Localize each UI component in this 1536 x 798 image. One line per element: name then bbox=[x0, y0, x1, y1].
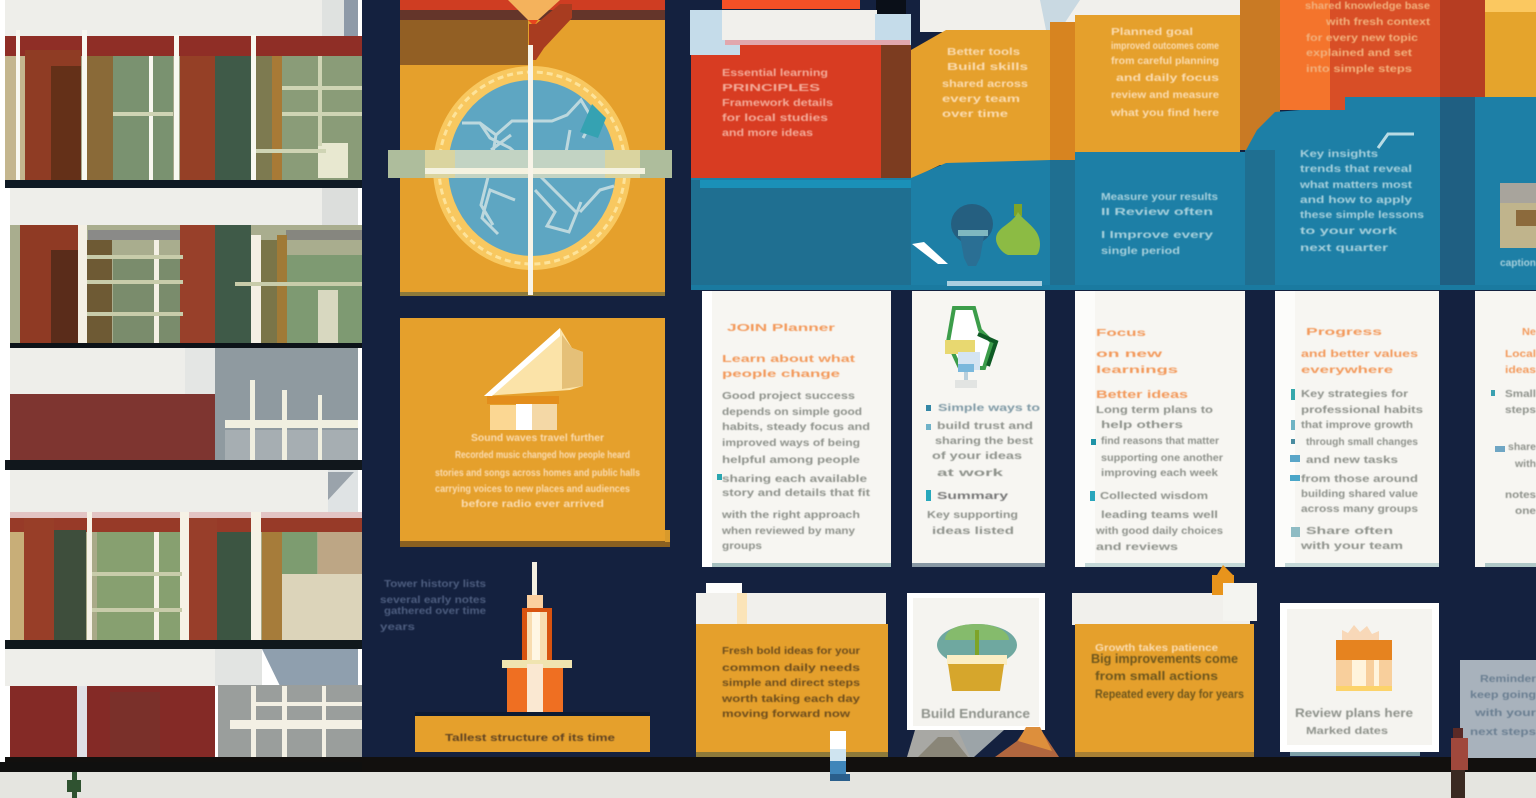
orange columns: explained and set bbox=[1306, 48, 1413, 59]
bottom panel 1: common daily needs bbox=[722, 663, 861, 674]
icon: mountains bbox=[907, 727, 1059, 757]
grey card: keep going bbox=[1470, 690, 1536, 701]
card 5: with bbox=[1514, 459, 1536, 470]
panel: gramophone bbox=[400, 318, 670, 547]
grey card bbox=[1460, 660, 1536, 758]
panel: globe bbox=[388, 0, 672, 296]
orange columns: for every new topic bbox=[1306, 33, 1419, 44]
orange columns: improved outcomes come bbox=[1111, 41, 1219, 52]
note text: years bbox=[380, 622, 416, 633]
red panel: Framework details bbox=[722, 98, 834, 109]
bottom panel 2: Big improvements come bbox=[1091, 651, 1238, 666]
card 4: everywhere bbox=[1301, 365, 1394, 376]
text block: stories and songs across homes and public halls bbox=[435, 468, 640, 479]
blue band: Key insights bbox=[1300, 149, 1379, 160]
floor 2 bbox=[10, 188, 362, 348]
card 2: build trust and bbox=[937, 421, 1033, 432]
card 1: habits, steady focus and bbox=[722, 422, 870, 433]
card 2: of your ideas bbox=[932, 451, 1023, 462]
card 2: Simple ways to bbox=[938, 403, 1040, 414]
red panel bbox=[690, 0, 911, 179]
card 1: when reviewed by many bbox=[721, 526, 855, 537]
icon: trend line bbox=[1378, 134, 1414, 148]
card 1: depends on simple good bbox=[722, 407, 862, 418]
bottom card: calendar bbox=[1280, 603, 1439, 756]
text block: carrying voices to new places and audiences bbox=[435, 484, 630, 495]
red panel: for local studies bbox=[722, 113, 829, 124]
bottom card: calendar: Review plans here bbox=[1295, 706, 1413, 720]
bottom panel 2: Repeated every day for years bbox=[1095, 687, 1244, 701]
card 1: Good project success bbox=[722, 391, 856, 402]
icon: bulb bbox=[951, 204, 993, 266]
note text bbox=[380, 579, 487, 633]
card 3: Long term plans to bbox=[1096, 405, 1213, 416]
figure: person in blue bbox=[830, 731, 850, 781]
card 5: ideas bbox=[1505, 365, 1536, 376]
card 5: Local bbox=[1505, 349, 1536, 360]
card 3: on new bbox=[1096, 349, 1162, 360]
bottom panel 2: Growth takes patience bbox=[1095, 643, 1219, 654]
bottom card: plant bbox=[907, 593, 1059, 757]
ground bbox=[0, 757, 1536, 798]
card 1: improved ways of being bbox=[722, 438, 860, 449]
card 5: notes bbox=[1505, 490, 1536, 501]
icon: goblet bbox=[945, 308, 996, 388]
blue band: I Improve every bbox=[1101, 230, 1214, 241]
card 5: share bbox=[1508, 442, 1536, 453]
orange columns: from careful planning bbox=[1111, 56, 1219, 67]
figure: plant bbox=[67, 772, 81, 798]
card 3: Collected wisdom bbox=[1100, 491, 1208, 502]
icon: calendar bbox=[1336, 625, 1392, 691]
card 3: with good daily choices bbox=[1095, 526, 1223, 537]
card 1: groups bbox=[722, 541, 763, 552]
blue band: single period bbox=[1101, 246, 1180, 257]
card 2 bbox=[912, 291, 1045, 567]
card 3: leading teams well bbox=[1101, 510, 1218, 521]
orange columns: Better tools bbox=[947, 47, 1021, 58]
card 5: Ne bbox=[1522, 327, 1536, 338]
orange columns: Planned goal bbox=[1111, 27, 1193, 38]
card 4: and better values bbox=[1301, 349, 1419, 360]
card 5: Small bbox=[1505, 389, 1536, 400]
icon: pear bbox=[996, 204, 1040, 255]
card 3: help others bbox=[1101, 420, 1184, 431]
orange columns bbox=[911, 0, 1536, 179]
card 4: building shared value bbox=[1301, 489, 1418, 500]
floor 4 bbox=[5, 470, 362, 649]
card 2: ideas listed bbox=[932, 526, 1014, 537]
icon: white arrow bbox=[912, 242, 948, 264]
text block: before radio ever arrived bbox=[461, 499, 604, 510]
floor 3 bbox=[5, 348, 362, 470]
icon: tower bbox=[502, 562, 572, 712]
blue band: what matters most bbox=[1299, 180, 1413, 191]
label bar bbox=[415, 712, 650, 752]
bottom panel 1 bbox=[696, 583, 888, 757]
card 3: supporting one another bbox=[1101, 453, 1223, 464]
figure: person in red bbox=[1451, 728, 1468, 798]
card 1: story and details that fit bbox=[722, 488, 871, 499]
orange columns: what you find here bbox=[1110, 108, 1220, 119]
card 2: at work bbox=[937, 468, 1004, 479]
card 4: that improve growth bbox=[1301, 420, 1413, 431]
blue band: to your work bbox=[1300, 226, 1398, 237]
card 3: Focus bbox=[1096, 328, 1147, 339]
card 3: learnings bbox=[1096, 365, 1179, 376]
card 1: with the right approach bbox=[721, 510, 860, 521]
floor 5 bbox=[5, 649, 362, 762]
card 1: helpful among people bbox=[722, 455, 861, 466]
blue band: next quarter bbox=[1300, 243, 1388, 254]
blue band bbox=[691, 97, 1536, 290]
icon: globe bbox=[388, 45, 672, 295]
orange columns: Build skills bbox=[947, 62, 1029, 73]
label bar: Tallest structure of its time bbox=[445, 733, 616, 744]
floor 1 bbox=[5, 0, 362, 188]
card 1: sharing each available bbox=[722, 474, 868, 485]
bottom panel 2: from small actions bbox=[1095, 669, 1218, 683]
orange columns: shared across bbox=[942, 79, 1029, 90]
grey card: Reminder bbox=[1480, 674, 1536, 685]
icon: gramophone bbox=[484, 328, 583, 430]
card 5 bbox=[1475, 291, 1536, 567]
card 5: one bbox=[1515, 506, 1536, 517]
card 1: Learn about what bbox=[722, 354, 856, 365]
panel: building bbox=[0, 0, 362, 772]
blue band: and how to apply bbox=[1300, 195, 1413, 206]
note text: several early notes bbox=[380, 595, 487, 606]
orange columns: into simple steps bbox=[1306, 64, 1413, 75]
bottom panel 1: moving forward now bbox=[722, 709, 850, 720]
blue band: caption bbox=[1500, 258, 1536, 269]
note text: gathered over time bbox=[384, 606, 486, 617]
blue band: trends that reveal bbox=[1300, 164, 1412, 175]
orange columns: with fresh context bbox=[1325, 17, 1431, 28]
red panel: and more ideas bbox=[722, 128, 814, 139]
orange columns: and daily focus bbox=[1116, 73, 1220, 84]
card 4 bbox=[1275, 291, 1439, 567]
card 3: find reasons that matter bbox=[1101, 436, 1219, 447]
card 3 bbox=[1075, 291, 1245, 567]
card 4: from those around bbox=[1301, 474, 1418, 485]
thumbnail bbox=[1500, 183, 1536, 248]
card 4: Share often bbox=[1306, 526, 1393, 537]
text block bbox=[435, 433, 640, 510]
card 2: Key supporting bbox=[927, 510, 1018, 521]
red panel: PRINCIPLES bbox=[722, 83, 821, 94]
icon: plant bbox=[937, 624, 1017, 691]
bottom panel 1: Fresh bold ideas for your bbox=[722, 646, 860, 657]
card 3: and reviews bbox=[1096, 542, 1179, 553]
card 3: Better ideas bbox=[1096, 389, 1188, 401]
grey card: next steps bbox=[1470, 727, 1536, 738]
blue band: II Review often bbox=[1101, 207, 1213, 218]
red panel: Essential learning bbox=[722, 68, 828, 79]
bottom panel 1: worth taking each day bbox=[721, 694, 861, 705]
card 2: sharing the best bbox=[935, 436, 1034, 447]
text block: Recorded music changed how people heard bbox=[455, 450, 630, 461]
card 2: Summary bbox=[937, 491, 1009, 502]
card 4: professional habits bbox=[1301, 405, 1424, 416]
card 1: people change bbox=[722, 369, 841, 380]
card 4: and new tasks bbox=[1306, 455, 1399, 466]
card 1: JOIN Planner bbox=[727, 323, 835, 334]
card 4: Progress bbox=[1306, 327, 1383, 338]
orange columns: review and measure bbox=[1111, 90, 1219, 101]
grey card: with your bbox=[1474, 708, 1536, 719]
text block: Sound waves travel further bbox=[471, 433, 604, 444]
bottom panel 1: simple and direct steps bbox=[722, 678, 861, 689]
card 4: across many groups bbox=[1301, 504, 1419, 515]
bottom panel 2 bbox=[1072, 565, 1257, 757]
orange columns: over time bbox=[942, 109, 1009, 120]
card 5: steps bbox=[1505, 405, 1536, 416]
blue band: these simple lessons bbox=[1300, 210, 1425, 221]
note text: Tower history lists bbox=[384, 579, 486, 590]
card 4: with your team bbox=[1300, 541, 1403, 552]
card 1 bbox=[702, 291, 891, 567]
bottom card: plant: Build Endurance bbox=[921, 706, 1030, 721]
orange columns: shared knowledge base bbox=[1305, 1, 1430, 12]
card 3: improving each week bbox=[1101, 468, 1218, 479]
card 4: Key strategies for bbox=[1301, 389, 1408, 400]
card 4: through small changes bbox=[1306, 437, 1418, 448]
bottom card: calendar: Marked dates bbox=[1306, 726, 1389, 737]
orange columns: every team bbox=[942, 94, 1020, 105]
blue band: Measure your results bbox=[1101, 192, 1218, 203]
